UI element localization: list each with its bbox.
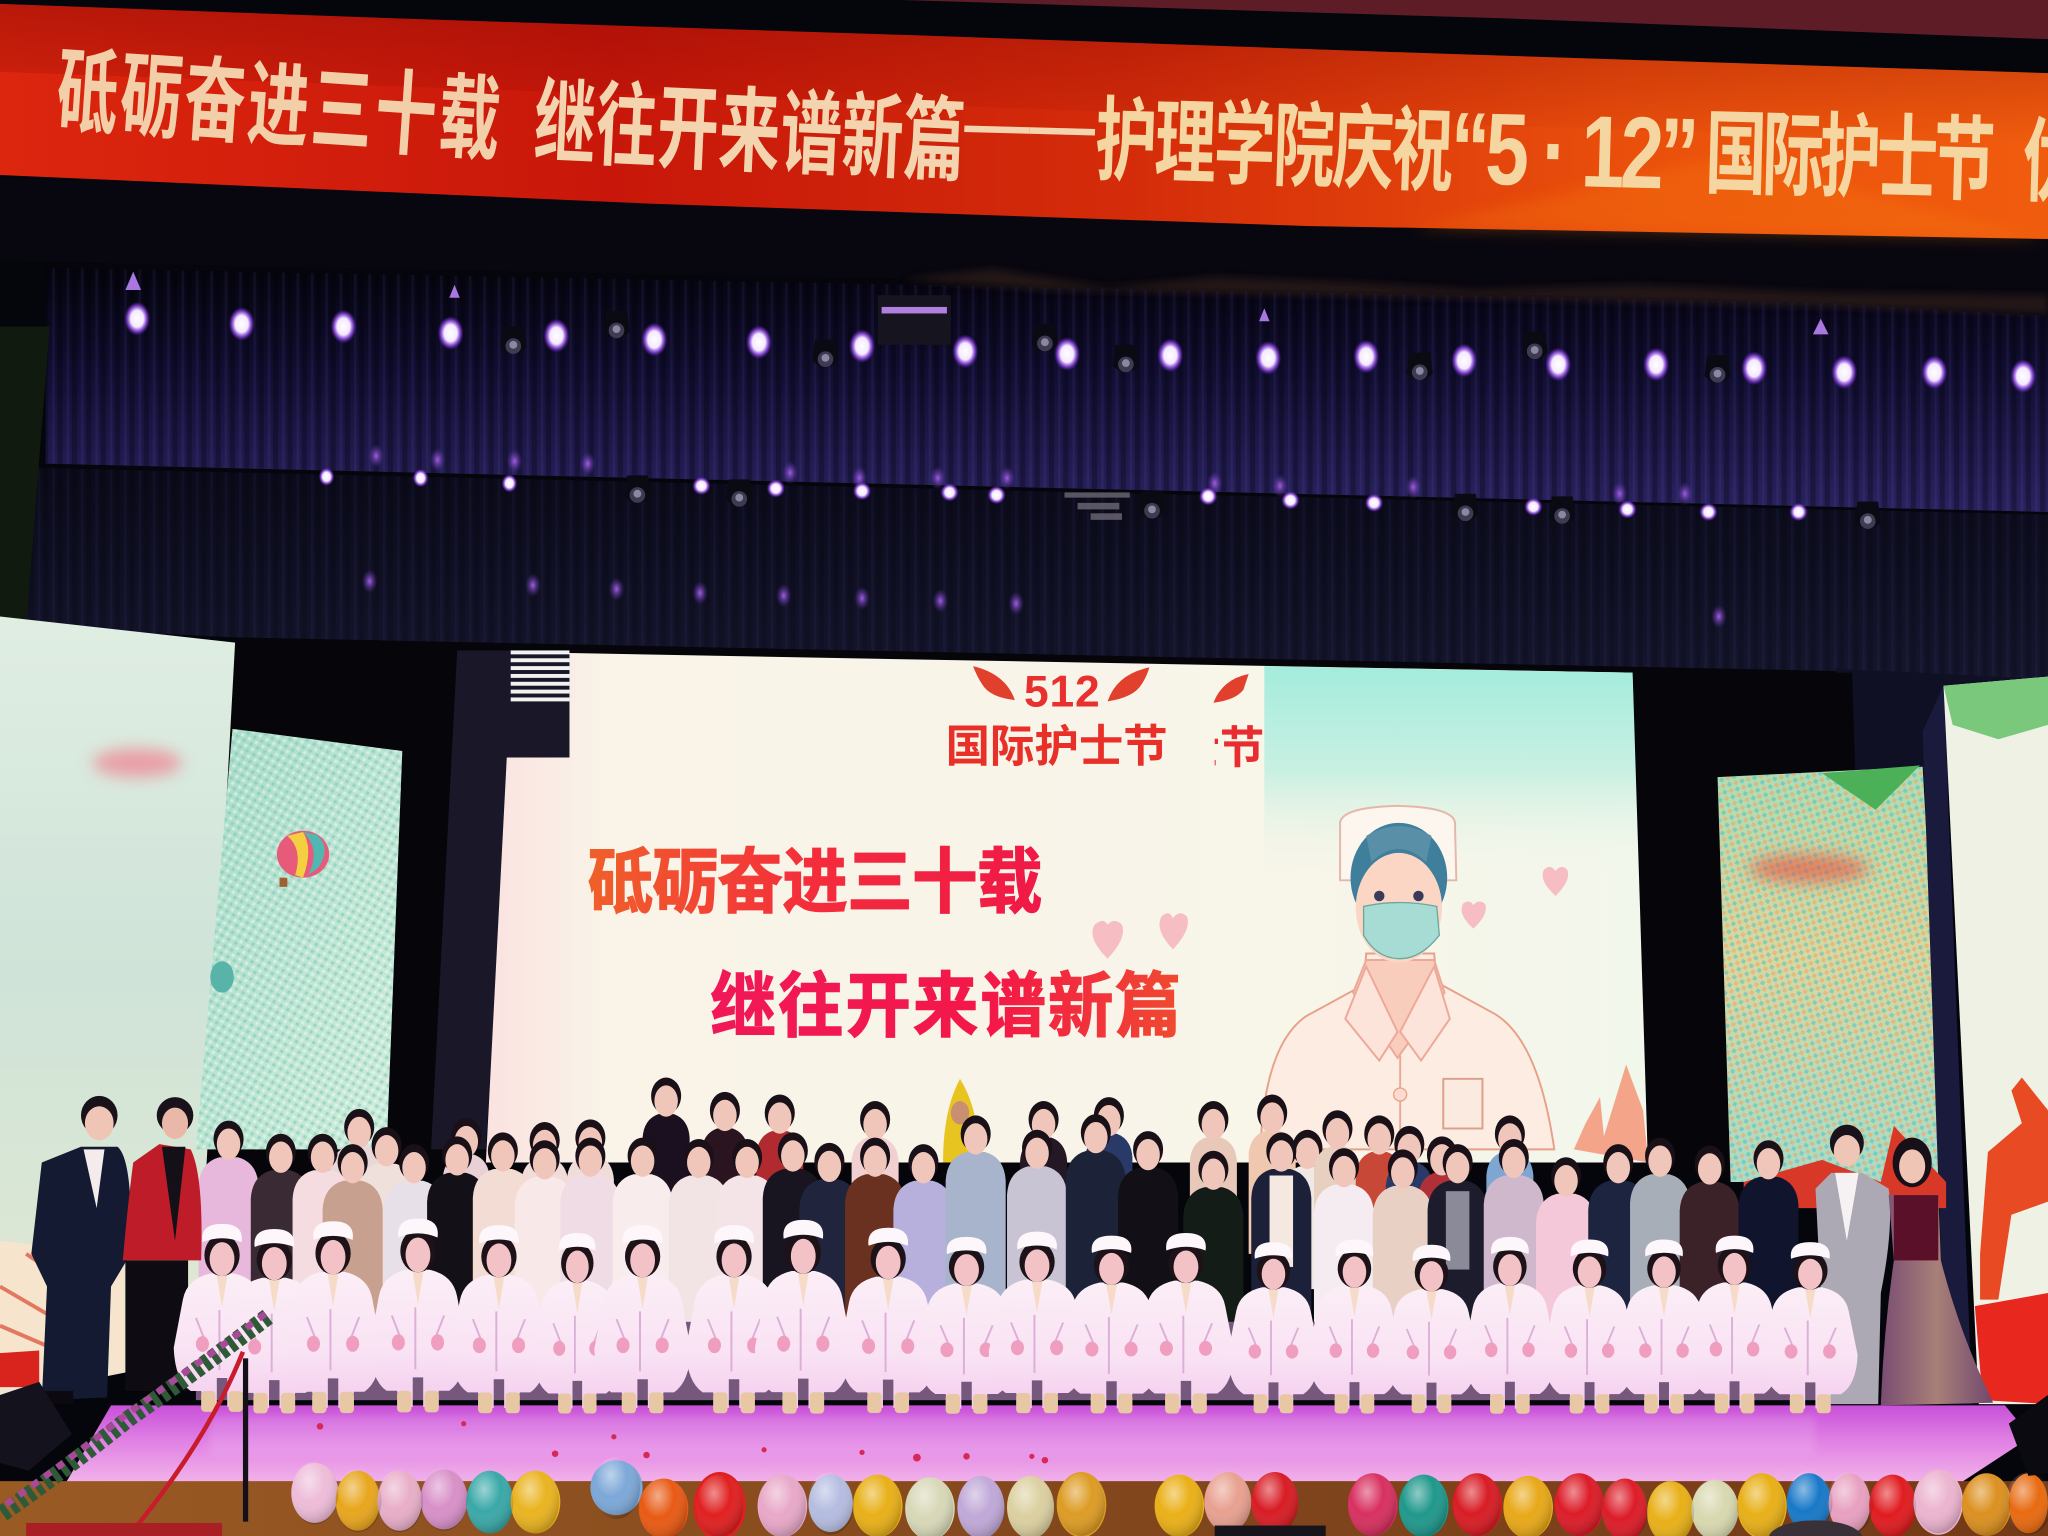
tinsel garland [0,1314,268,1515]
banner text: 5·12: “5 · 12” [1449,92,1700,212]
slogan line 1: 砥砺奋进三十载 [588,843,1042,922]
stage front wood panel [0,1481,2048,1536]
middle standing row of teachers [199,1109,1799,1343]
slogan line 2: 继往开来谱新篇 [711,967,1181,1046]
purple triangles of truss lights [125,272,1829,334]
icon: hot air balloon [277,831,329,887]
icon: small balloon [210,961,234,993]
male host in red jacket [123,1097,202,1391]
banner text: 砥砺奋进三十载: 砥砺奋进三十载 [53,39,504,173]
front row of crouching nurses [174,1219,1858,1414]
banner text: 继往开来谱新篇: 继往开来谱新篇 [532,71,967,194]
banner text: 国际护士节: 国际护士节 [1704,102,1997,213]
icon: repeated wing fragment [1213,674,1249,703]
barrier pole [243,1358,248,1522]
white striped corner [511,650,569,701]
person in yellow costume [943,1079,980,1162]
screen title repeat, clipped: 士节 [1176,724,1264,773]
left outer side screen [0,616,235,1398]
red banner [0,4,2048,239]
hearts [1092,867,1568,959]
left speaker [0,1382,72,1471]
red petals on floor [317,1421,1048,1464]
female host in long gown [1881,1138,1993,1405]
left inner side screen [196,729,402,1149]
illustrated nurse with face mask [1260,806,1554,1149]
right speaker [2009,1395,2048,1476]
moving head fixtures upper row [500,311,1731,383]
silhouette of dancers [1980,1078,2048,1300]
male host in grey suit [1816,1125,1890,1404]
lower stage curtain [26,468,2048,682]
moving head fixtures lower row [624,475,1881,529]
banner dash: —— [964,87,1097,164]
lower row of purple LED lights [319,468,1808,521]
icon: left wing [973,666,1015,700]
black band right of central screen [1633,673,1868,1176]
central LED screen [486,650,1651,1162]
red carpet backdrop at left [0,1351,39,1387]
right side curtain column [1835,669,2048,784]
right outer side screen [1944,677,2048,1404]
screen title: 国际护士节: 国际护士节 [946,722,1168,771]
red floor edge bottom left [26,1523,222,1536]
ceiling above banner [901,0,2048,39]
lighting box on truss [878,295,951,345]
hanging snowflake decoration [1064,492,1130,520]
right inner side screen [1718,765,1946,1182]
upper stage curtain [46,268,2048,512]
black stage recess behind screens [196,637,1959,1176]
banner text: 护理学院庆祝: 护理学院庆祝 [1094,89,1455,204]
lower legs of middle row [196,1322,1842,1400]
icon: right wing [1108,667,1149,701]
teal top right part of screen [1264,666,1640,875]
audience heads at bottom [1215,1520,1863,1536]
male host in navy suit [31,1096,131,1404]
row of balloons [291,1456,2048,1536]
red rope barrier [137,1352,243,1526]
flame petals at lower right of screen [1574,1064,1648,1162]
central dark pillar [431,650,569,1149]
right dark column [1923,686,1972,1404]
back row of people on risers [443,1078,1533,1296]
dim reflections on curtain [362,444,1727,628]
stage floor [65,1405,2031,1484]
red silhouettes behind host on right [1744,1126,1946,1208]
floor reflections [209,1416,1816,1455]
left proscenium edge [0,327,50,705]
upper row of purple LED lights [124,302,2036,393]
screen title: 512: 512 [1024,668,1100,717]
upper valance with brown fringe [0,178,2048,316]
